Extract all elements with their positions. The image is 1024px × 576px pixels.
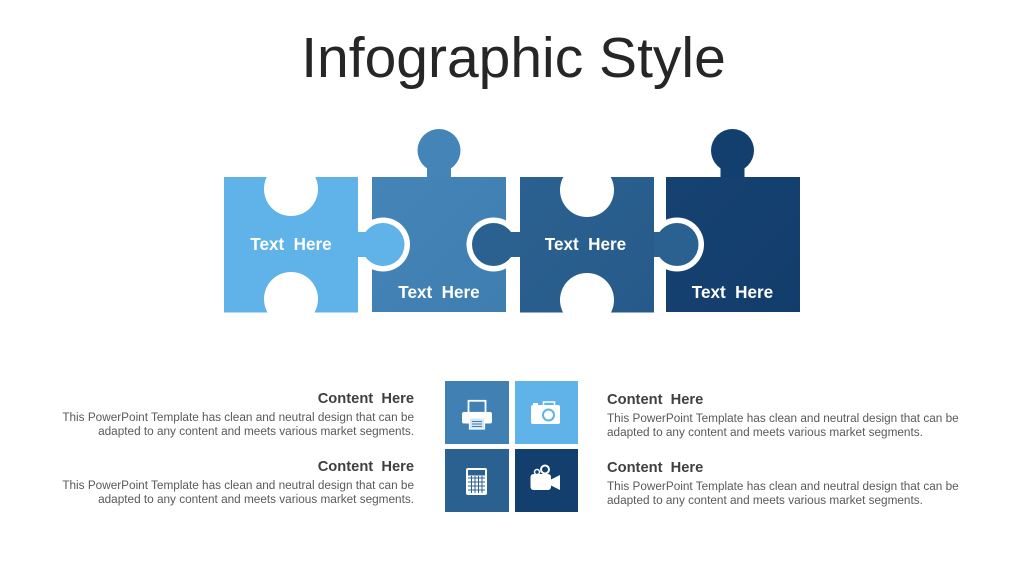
- text block: bottom right: adapted to any content and meets various market segments.: [607, 494, 923, 507]
- puzzle piece 2: [372, 129, 506, 312]
- text block: top left: adapted to any content and meets various market segments.: [98, 425, 414, 438]
- puzzle piece 4: [666, 129, 800, 312]
- piece 3 label: Text Here: [545, 235, 626, 254]
- puzzle piece 1: [224, 162, 410, 326]
- text block: bottom left: This PowerPoint Template has clean and neutral design that can be: [62, 479, 414, 492]
- text block: bottom left: [62, 459, 414, 506]
- icon tile: camera: [515, 381, 578, 444]
- text block: bottom right: Content Here: [607, 460, 703, 476]
- text block: top left: This PowerPoint Template has clean and neutral design that can be: [62, 411, 414, 424]
- text block: top left: Content Here: [318, 391, 414, 407]
- piece 2 label: Text Here: [398, 283, 480, 302]
- puzzle chain: [224, 129, 800, 327]
- title: Infographic Style: [301, 26, 726, 90]
- icon tile: video camera: [515, 449, 578, 512]
- text block: bottom right: This PowerPoint Template has clean and neutral design that can be: [607, 480, 959, 493]
- text block: top right: This PowerPoint Template has clean and neutral design that can be: [607, 412, 959, 425]
- text block: bottom left: adapted to any content and meets various market segments.: [98, 493, 414, 506]
- text block: top right: Content Here: [607, 392, 703, 408]
- text block: bottom right: [607, 460, 959, 507]
- piece 4 label: Text Here: [692, 283, 773, 302]
- text block: top right: adapted to any content and meets various market segments.: [607, 426, 923, 439]
- text block: top left: [62, 391, 414, 438]
- puzzle piece 3: [466, 163, 704, 327]
- text block: top right: [607, 392, 959, 439]
- icon tile: calculator: [445, 449, 509, 512]
- text block: bottom left: Content Here: [318, 459, 414, 475]
- piece 1 label: Text Here: [250, 235, 332, 254]
- icon tile: printer: [445, 381, 509, 444]
